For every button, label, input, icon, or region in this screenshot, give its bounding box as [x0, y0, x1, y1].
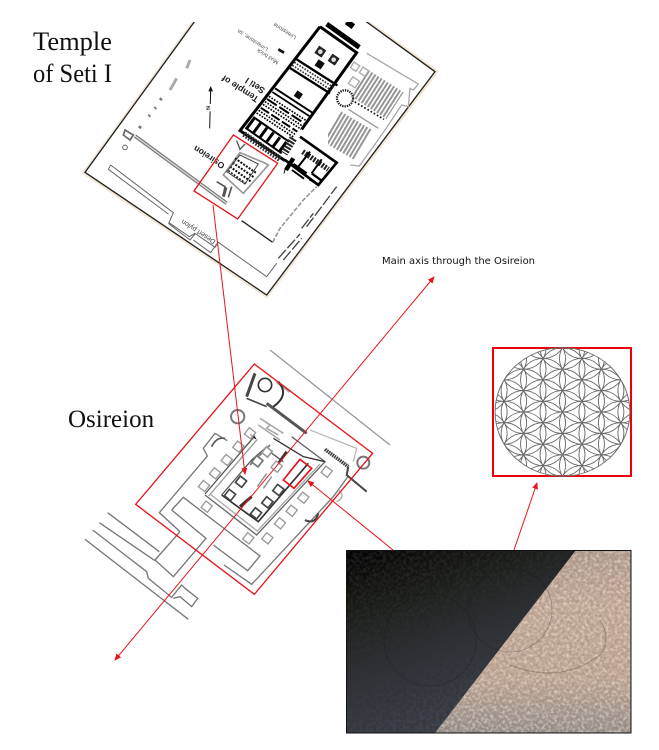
- title: Temple of Seti I: Temple: [33, 27, 112, 56]
- inner piers: [224, 447, 284, 519]
- carved circle traces: [394, 588, 552, 686]
- plan legend: Limestone, sa: [236, 27, 269, 52]
- outer walls: [85, 418, 357, 619]
- dark north-east walls and round features: [231, 373, 369, 492]
- plan legend: Mud brick: [256, 47, 280, 65]
- caption: main axis: Main axis through the Osireion: [382, 256, 535, 267]
- pale southern wing with stripes: [332, 53, 418, 166]
- central hall walls: [205, 434, 325, 535]
- arrow: photo to detail box: [308, 481, 393, 550]
- plan: Temple of Seti I site sheet: [85, 20, 436, 296]
- north arrow: N: [206, 105, 212, 110]
- sheet border: [85, 20, 435, 295]
- flower of life pattern: [494, 347, 630, 477]
- photo: carved flower of life on stone: [346, 550, 631, 733]
- red outline of the Osireion: [136, 364, 373, 594]
- sunlit stone: [436, 551, 630, 732]
- sheet paper: [85, 20, 436, 296]
- plan label: Osireion: Osireion: [192, 144, 226, 171]
- sunlit stone mottling: [436, 551, 630, 732]
- north arrow: [206, 86, 214, 128]
- arrow: photo to flower: [514, 483, 537, 550]
- plan label: Temple of Seti I: Temple of: [219, 73, 260, 104]
- photo border: [346, 550, 631, 733]
- plan legend: [236, 21, 298, 65]
- plan legend: Limestone: [273, 21, 298, 40]
- red detail box: [283, 459, 312, 488]
- piers: [198, 428, 332, 544]
- title: Temple of Seti I: of Seti I: [33, 59, 112, 88]
- temple shrines: [294, 46, 340, 100]
- flower of life panel: [492, 347, 632, 477]
- outer gray line: [270, 350, 390, 445]
- arrow: site plan to Osireion: [213, 205, 245, 474]
- label: Osireion: Osireion: [68, 406, 155, 433]
- arrows: [115, 205, 537, 660]
- temple main building: [240, 22, 359, 185]
- shadowed stone: [346, 550, 576, 733]
- shadow grain: [347, 551, 574, 732]
- plan label: Temple of Seti I: Seti I: [243, 76, 267, 96]
- red locator box: [194, 135, 278, 219]
- small Osireion plan: [217, 141, 268, 197]
- enclosure walls and passages: [108, 60, 337, 277]
- flower frame: [493, 348, 631, 476]
- plan label: Desert pylon: Desert pylon: [180, 218, 217, 245]
- plan: Osireion enlarged: [85, 350, 390, 619]
- arrow: main axis: [115, 277, 434, 660]
